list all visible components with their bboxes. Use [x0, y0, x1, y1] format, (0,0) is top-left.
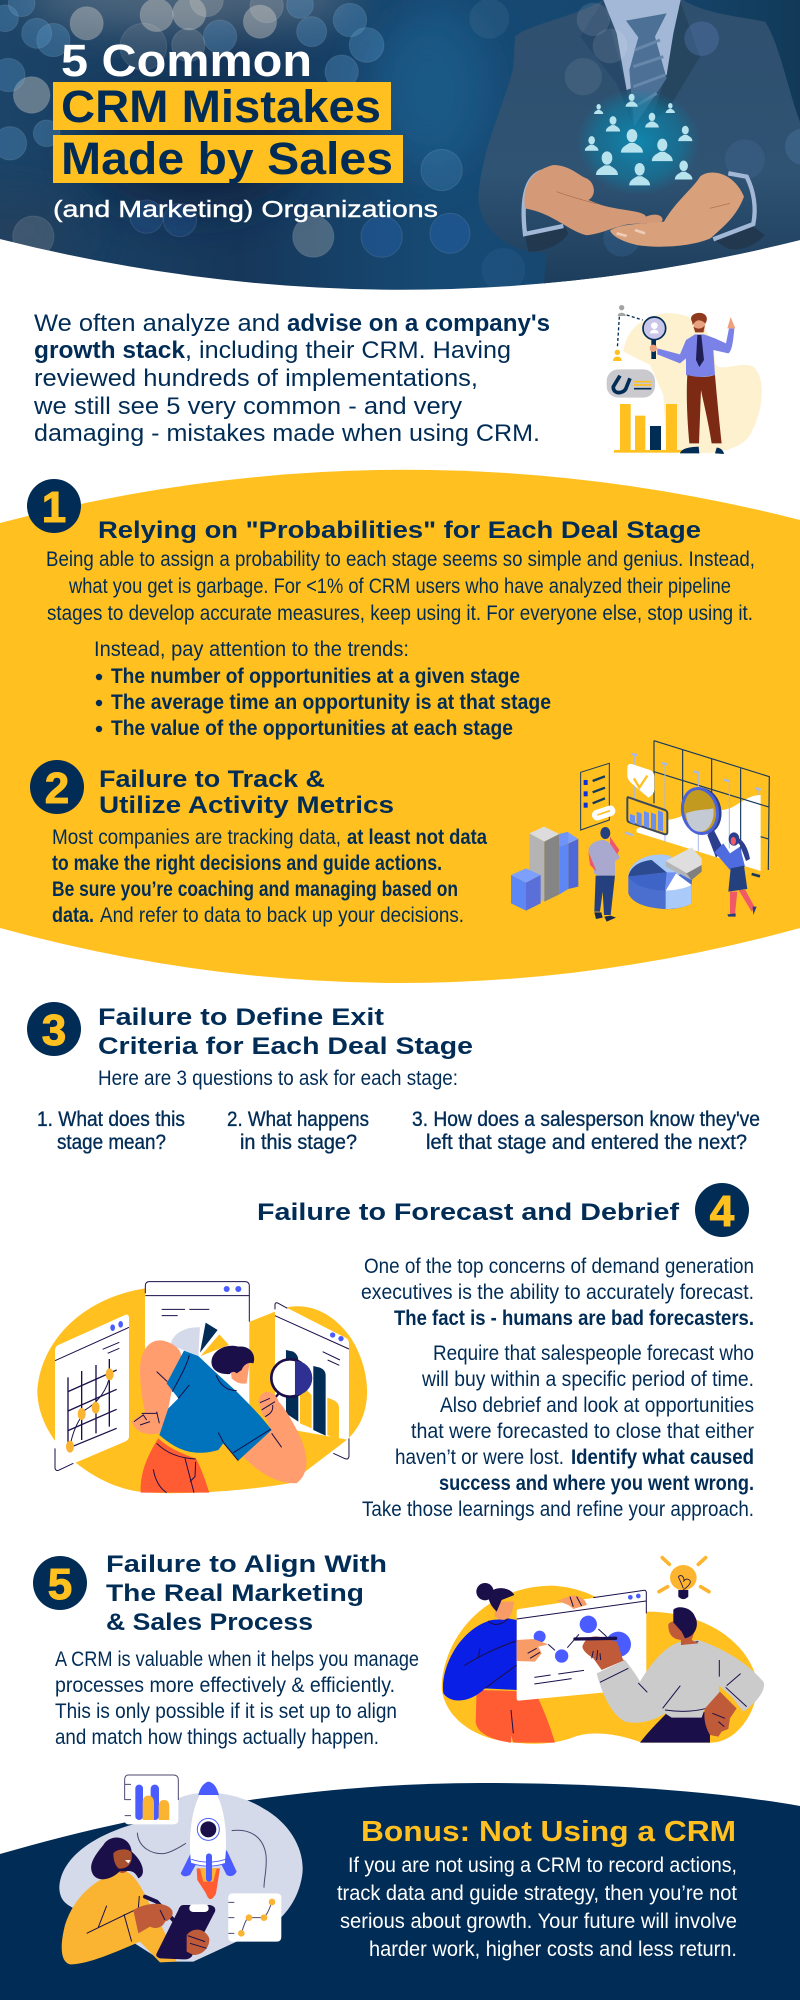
body: mistake 4: executives is the ability to accurately forecast.	[361, 1281, 754, 1304]
badge 3	[27, 1002, 81, 1056]
body: mistake 4: haven’t or were lost.	[395, 1446, 564, 1469]
body: mistake 1	[46, 548, 755, 625]
body: mistake 4: Require that salespeople forecast who	[433, 1342, 754, 1365]
bonus heading: Bonus: Not Using a CRM	[361, 1816, 736, 1848]
title	[53, 35, 438, 222]
hero photo background	[0, 0, 800, 300]
panel: hero	[0, 0, 800, 300]
body: mistake 2: to make the right decisions and guide actions.	[52, 852, 442, 875]
body: mistake 2: Most companies are tracking data,	[52, 826, 341, 849]
body: mistake 2: data.	[52, 904, 94, 927]
body: mistake 2	[52, 826, 487, 927]
body: mistake 5	[55, 1648, 419, 1749]
heading: mistake 2: Utilize Activity Metrics	[99, 792, 394, 819]
illustration: data analysis isometric scene	[511, 741, 769, 922]
question 3	[412, 1108, 760, 1154]
intro text: growth stack	[34, 337, 186, 364]
intro line: mistake 3: Here are 3 questions to ask for each stage:	[98, 1067, 458, 1090]
question 1: stage mean?	[57, 1131, 166, 1154]
body: mistake 5: processes more effectively & efficiently.	[55, 1674, 395, 1697]
bonus body text: serious about growth. Your future will involve	[340, 1910, 737, 1933]
body: mistake 4: will buy within a specific period of time.	[421, 1368, 754, 1391]
illustration: person launching rocket	[59, 1775, 303, 1964]
panel: bonus navy footer	[0, 1783, 800, 2000]
body: mistake 2: And refer to data to back up your decisions.	[100, 904, 464, 927]
body: mistake 2: at least not data	[347, 826, 487, 849]
intro text: damaging - mistakes made when using CRM.	[34, 420, 540, 447]
intro text	[33, 310, 550, 447]
intro text: advise on a company's	[287, 310, 550, 337]
title highlight: Made by Sales	[53, 135, 403, 183]
title line: 5 Common: 5 Common	[61, 35, 312, 86]
businessman with cupped hands	[469, 0, 800, 292]
question 3: left that stage and entered the next?	[426, 1131, 747, 1154]
question 2	[227, 1108, 369, 1154]
bonus body text	[337, 1854, 737, 1961]
intro text: We often analyze and	[34, 310, 280, 337]
body: mistake 4	[361, 1255, 754, 1521]
bonus body text: harder work, higher costs and less return.	[369, 1938, 737, 1961]
question 2: 2. What happens	[227, 1108, 369, 1131]
body: mistake 5: This is only possible if it is set up to align	[55, 1700, 397, 1723]
body: mistake 4: that were forecasted to close that either	[411, 1420, 754, 1443]
body: mistake 4: Identify what caused	[571, 1446, 754, 1469]
body: mistake 4: Also debrief and look at opportunities	[440, 1394, 754, 1417]
heading: mistake 2	[99, 766, 394, 819]
trends list: The number of opportunities at a given stage	[111, 665, 520, 688]
heading: mistake 3: Criteria for Each Deal Stage	[98, 1033, 473, 1060]
trends list: The value of the opportunities at each stage	[111, 717, 513, 740]
heading: mistake 2: Failure to Track &	[99, 766, 325, 793]
heading: mistake 3	[98, 1004, 473, 1060]
heading: mistake 4: Failure to Forecast and Debrief	[257, 1199, 680, 1226]
question 2: in this stage?	[240, 1131, 357, 1154]
heading: mistake 5: Failure to Align With	[106, 1551, 387, 1578]
heading: mistake 1: Relying on "Probabilities" for Each Deal Stage	[98, 517, 701, 544]
badge 4	[695, 1183, 749, 1237]
badge 4: 4	[710, 1187, 735, 1236]
body: mistake 4: Take those learnings and refine your approach.	[362, 1498, 754, 1521]
intro text: we still see 5 very common - and very	[33, 393, 462, 420]
question 1: 1. What does this	[37, 1108, 185, 1131]
body: mistake 4: success and where you went wrong.	[439, 1472, 754, 1495]
question 3: 3. How does a salesperson know they've	[412, 1108, 760, 1131]
subtitle: (and Marketing) Organizations	[53, 196, 438, 222]
badge 2: 2	[45, 764, 69, 813]
heading: mistake 5	[106, 1551, 387, 1636]
illustration: two colleagues at a whiteboard	[442, 1558, 764, 1744]
trends list: The average time an opportunity is at that stage	[111, 691, 551, 714]
badge 3: 3	[42, 1006, 66, 1055]
trends list	[94, 638, 551, 740]
title line: Made by Sales: Made by Sales	[61, 133, 393, 184]
badge 1: 1	[42, 483, 66, 532]
intro text: reviewed hundreds of implementations,	[34, 365, 478, 392]
title line: CRM Mistakes: CRM Mistakes	[61, 81, 381, 132]
intro text: , including their CRM. Having	[185, 337, 511, 364]
body: mistake 5: A CRM is valuable when it helps you manage	[55, 1648, 419, 1671]
illustration: person inspecting charts with magnifier	[37, 1282, 367, 1493]
trends list: Instead, pay attention to the trends:	[94, 638, 409, 661]
heading: mistake 5: & Sales Process	[106, 1609, 313, 1636]
badge 5	[33, 1556, 87, 1610]
body: mistake 4: One of the top concerns of demand generation	[364, 1255, 754, 1278]
illustration: analyst with magnifier and charts	[607, 305, 762, 454]
body: mistake 5: and match how things actually happen.	[55, 1726, 379, 1749]
bonus body text: If you are not using a CRM to record actions,	[348, 1854, 737, 1877]
bonus body text: track data and guide strategy, then you’re not	[337, 1882, 737, 1905]
badge 1	[27, 479, 81, 533]
heading: mistake 5: The Real Marketing	[106, 1580, 364, 1607]
heading: mistake 3: Failure to Define Exit	[98, 1004, 384, 1031]
body: mistake 4: The fact is - humans are bad forecasters.	[394, 1307, 754, 1330]
panel: yellow band for mistakes 1 and 2	[0, 470, 800, 983]
body: mistake 2: Be sure you’re coaching and managing based on	[52, 878, 458, 901]
question 1	[37, 1108, 185, 1154]
badge 2	[30, 760, 84, 814]
title highlight: CRM Mistakes	[53, 82, 391, 130]
badge 5: 5	[48, 1560, 72, 1609]
